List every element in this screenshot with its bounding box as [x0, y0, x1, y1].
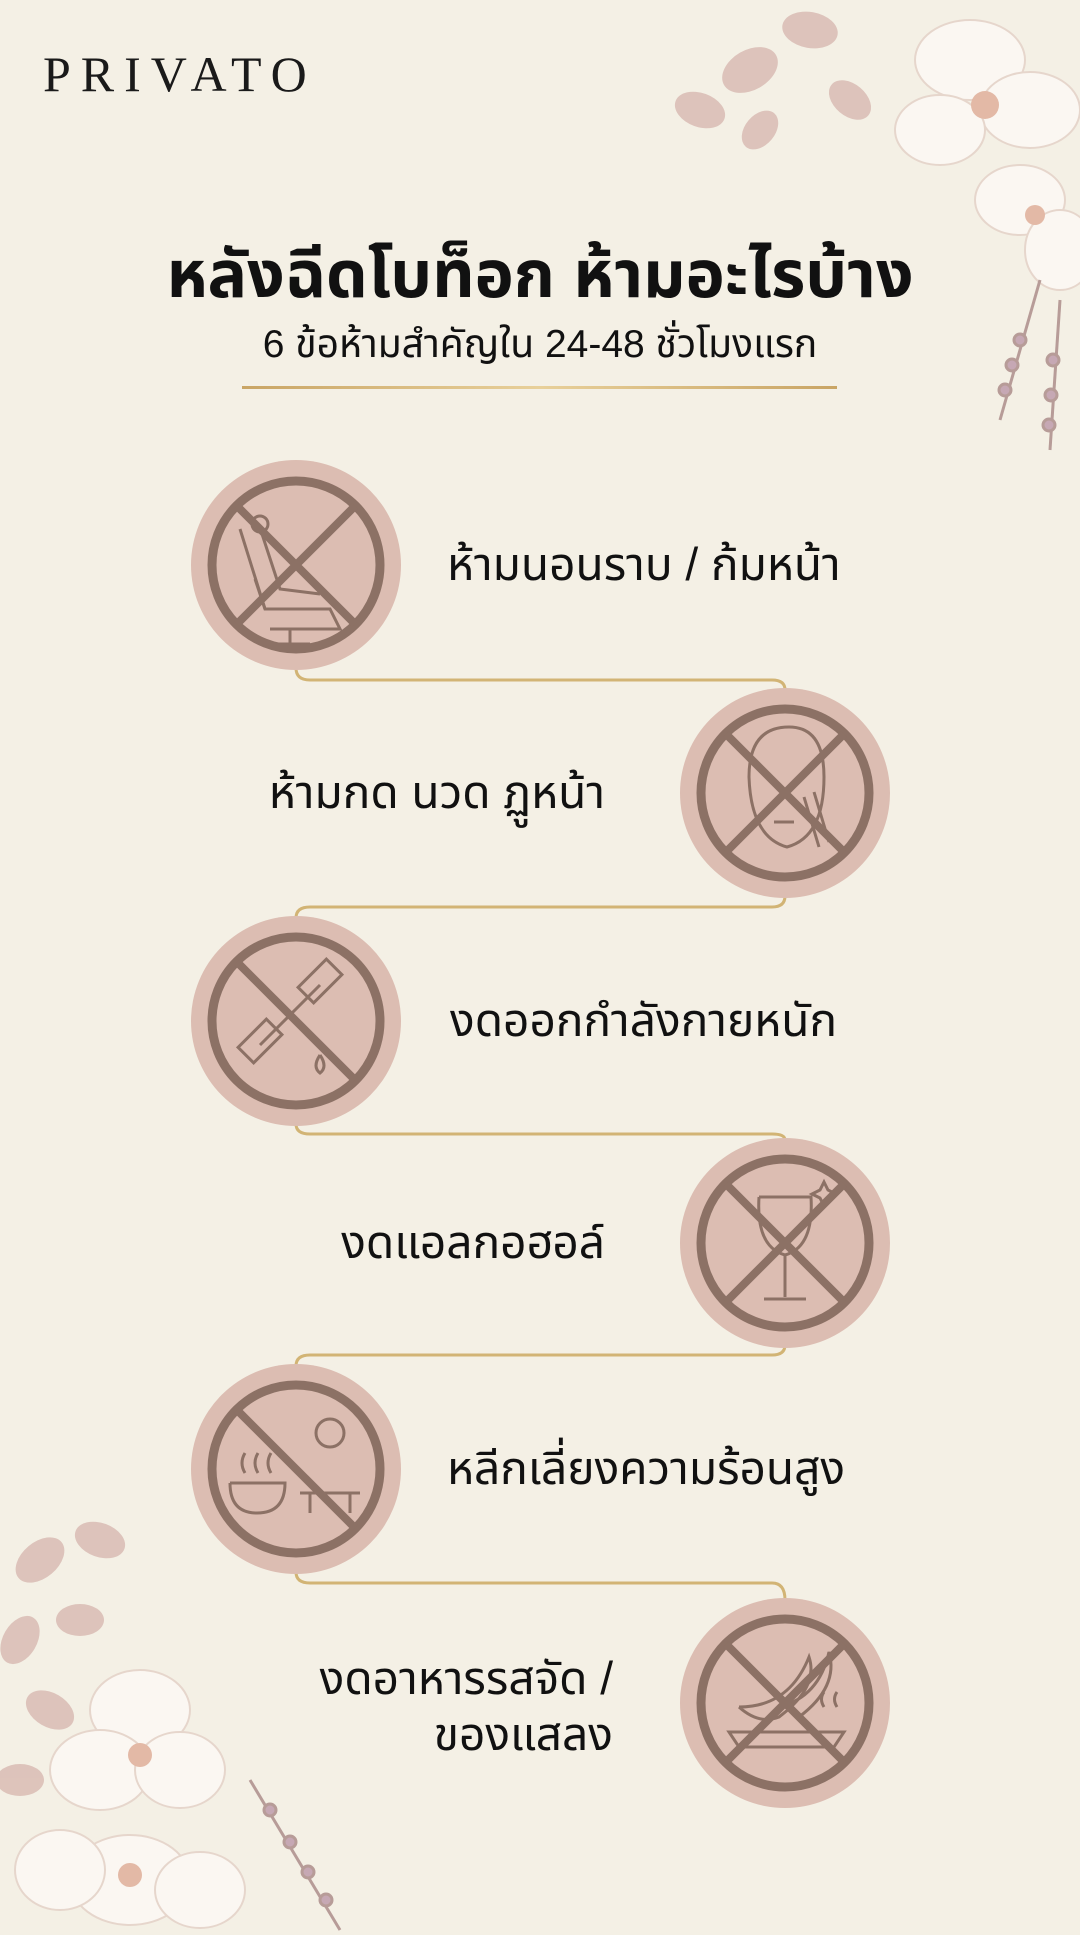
text 1: ห้ามนอนราบ / ก้มหน้า — [447, 538, 841, 590]
text 6: งดอาหารรสจัด / — [320, 1652, 613, 1704]
text 6 — [320, 1652, 613, 1760]
icon 2: no face touching — [680, 688, 890, 898]
title: หลังฉีดโบท็อก ห้ามอะไรบ้าง — [166, 237, 914, 311]
decoration: flowers bottom left — [0, 1522, 342, 1931]
icon 5: avoid heat — [191, 1364, 401, 1574]
icon 3: no heavy exercise — [191, 916, 401, 1126]
subtitle: 6 ข้อห้ามสำคัญใน 24-48 ชั่วโมงแรก — [263, 323, 817, 366]
text 2: ห้ามกด นวด ฏูหน้า — [269, 766, 605, 818]
text 3: งดออกกำลังกายหนัก — [450, 994, 837, 1046]
decoration: flowers top right — [674, 12, 1080, 450]
text 4: งดแอลกอฮอล์ — [341, 1216, 605, 1268]
logo: PRIVATO — [43, 46, 317, 102]
text 5: หลีกเลี่ยงความร้อนสูง — [447, 1442, 845, 1494]
icon 6: no spicy food — [680, 1598, 890, 1808]
gold divider — [242, 386, 837, 389]
icon 4: no alcohol — [680, 1138, 890, 1348]
icon 1: no lying down — [191, 460, 401, 670]
text 6: ของแสลง — [434, 1708, 613, 1760]
